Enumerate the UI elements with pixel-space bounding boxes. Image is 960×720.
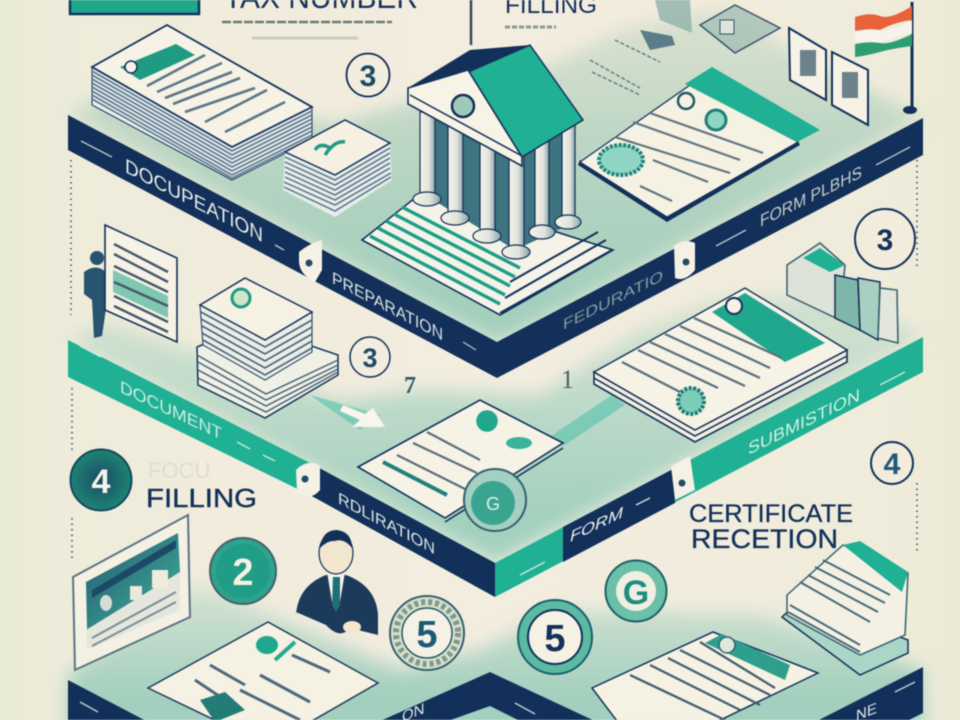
streak: teal flow xyxy=(310,395,625,445)
building roof teal xyxy=(468,45,583,157)
bottom platform surface xyxy=(68,585,923,720)
tab right xyxy=(671,456,695,500)
icon: tall document xyxy=(105,225,177,342)
arrow: white flow xyxy=(340,405,385,427)
panel: top platform xyxy=(68,10,923,378)
upper pile xyxy=(200,278,312,380)
heading: certificate reception xyxy=(689,500,853,554)
bottom band right xyxy=(815,667,923,720)
label: feduratio: FEDURATIO xyxy=(563,268,663,334)
badge: number 5 ring: 5 xyxy=(416,614,438,656)
top-left green header block xyxy=(70,0,199,14)
bottom band dashes xyxy=(80,682,915,714)
tab left xyxy=(296,463,320,497)
building base steps xyxy=(362,190,613,315)
icon: document stack 3 xyxy=(197,278,338,418)
label: rdliration: RDLIRATION xyxy=(338,489,435,558)
badge: number 3 middle: 3 xyxy=(362,343,378,373)
middle band teal xyxy=(68,337,923,597)
building interior xyxy=(425,105,575,250)
badge: letter G xyxy=(606,560,666,622)
badge: number 4 dark xyxy=(70,450,132,510)
number 7: 7 xyxy=(404,373,416,399)
caption under title xyxy=(222,22,392,38)
badge: number 4 right xyxy=(871,442,913,484)
dotted guide lines xyxy=(71,160,917,560)
badge: number 4 right: 4 xyxy=(884,448,901,481)
heading: certificate reception: RECETION xyxy=(691,524,838,554)
badge: number 4 dark: 4 xyxy=(92,463,111,501)
badge: number 3 top xyxy=(346,54,390,96)
middle platform surface xyxy=(68,295,923,563)
icon: center seal xyxy=(464,469,526,531)
badge: number 5 ring xyxy=(390,596,464,670)
icon: person silhouette xyxy=(84,251,108,338)
building pediment xyxy=(408,70,522,166)
heading: filling: FILLING xyxy=(146,483,257,513)
panel: bottom platform xyxy=(68,585,923,720)
icon: folders xyxy=(787,243,898,343)
icon: document stack 1 xyxy=(92,25,312,180)
icon: government building xyxy=(362,45,613,315)
lower pile xyxy=(197,325,338,418)
badge: number 2: 2 xyxy=(232,552,254,594)
middle band navy right xyxy=(563,468,675,562)
label: docupeation: DOCUPEATION xyxy=(125,154,263,247)
top platform edge band xyxy=(68,115,923,378)
icon: upper background papers xyxy=(590,0,780,95)
badge: letter G: G xyxy=(623,574,649,612)
faded label: FOCU xyxy=(148,458,210,483)
heading: certificate reception: CERTIFICATE xyxy=(689,500,853,528)
badge: number 5 xyxy=(518,600,592,674)
icon: center seal: G xyxy=(486,494,500,514)
tab right xyxy=(674,241,695,279)
icon: framed documents xyxy=(789,28,868,125)
label: form: FORM xyxy=(570,504,624,546)
icon: large form right xyxy=(594,288,847,442)
label: submistion: SUBMISTION xyxy=(748,385,860,459)
panel: middle platform xyxy=(68,295,923,597)
middle band navy left xyxy=(310,463,495,597)
label: document: DOCUMENT xyxy=(120,377,222,444)
icon: monitor xyxy=(73,515,190,670)
icon: flag xyxy=(855,2,917,114)
icon: bottom left form xyxy=(148,622,378,720)
badge: number 2 xyxy=(210,538,276,604)
form seal xyxy=(599,145,643,175)
number 1: 1 xyxy=(561,365,574,394)
icon: document stack 2 xyxy=(283,120,392,217)
label: preparation: PREPARATION xyxy=(332,268,443,344)
badge: number 3 middle xyxy=(350,337,390,377)
badge: number 3 right: 3 xyxy=(877,224,893,257)
bottom band left xyxy=(68,680,148,720)
icon: book pile xyxy=(782,541,908,675)
building roof dark xyxy=(408,45,530,88)
vertical marker line xyxy=(470,0,472,45)
label: form plbhs: FORM PLBHS xyxy=(760,162,862,231)
icon: form document top right xyxy=(578,67,820,222)
top platform surface xyxy=(68,10,923,345)
icon: center form xyxy=(358,400,563,522)
bottom band center xyxy=(378,672,597,720)
middle band dashes xyxy=(80,346,905,575)
caption under filling xyxy=(505,26,556,28)
building columns xyxy=(413,112,581,259)
icon: bottom right form xyxy=(592,632,818,720)
tab left xyxy=(299,240,322,282)
band dashes xyxy=(81,141,910,350)
badge: number 3 right xyxy=(855,209,915,269)
badge: number 5: 5 xyxy=(544,618,566,660)
icon: businessman xyxy=(296,530,378,635)
badge: number 3 top: 3 xyxy=(360,60,376,93)
building emblem xyxy=(452,95,474,117)
